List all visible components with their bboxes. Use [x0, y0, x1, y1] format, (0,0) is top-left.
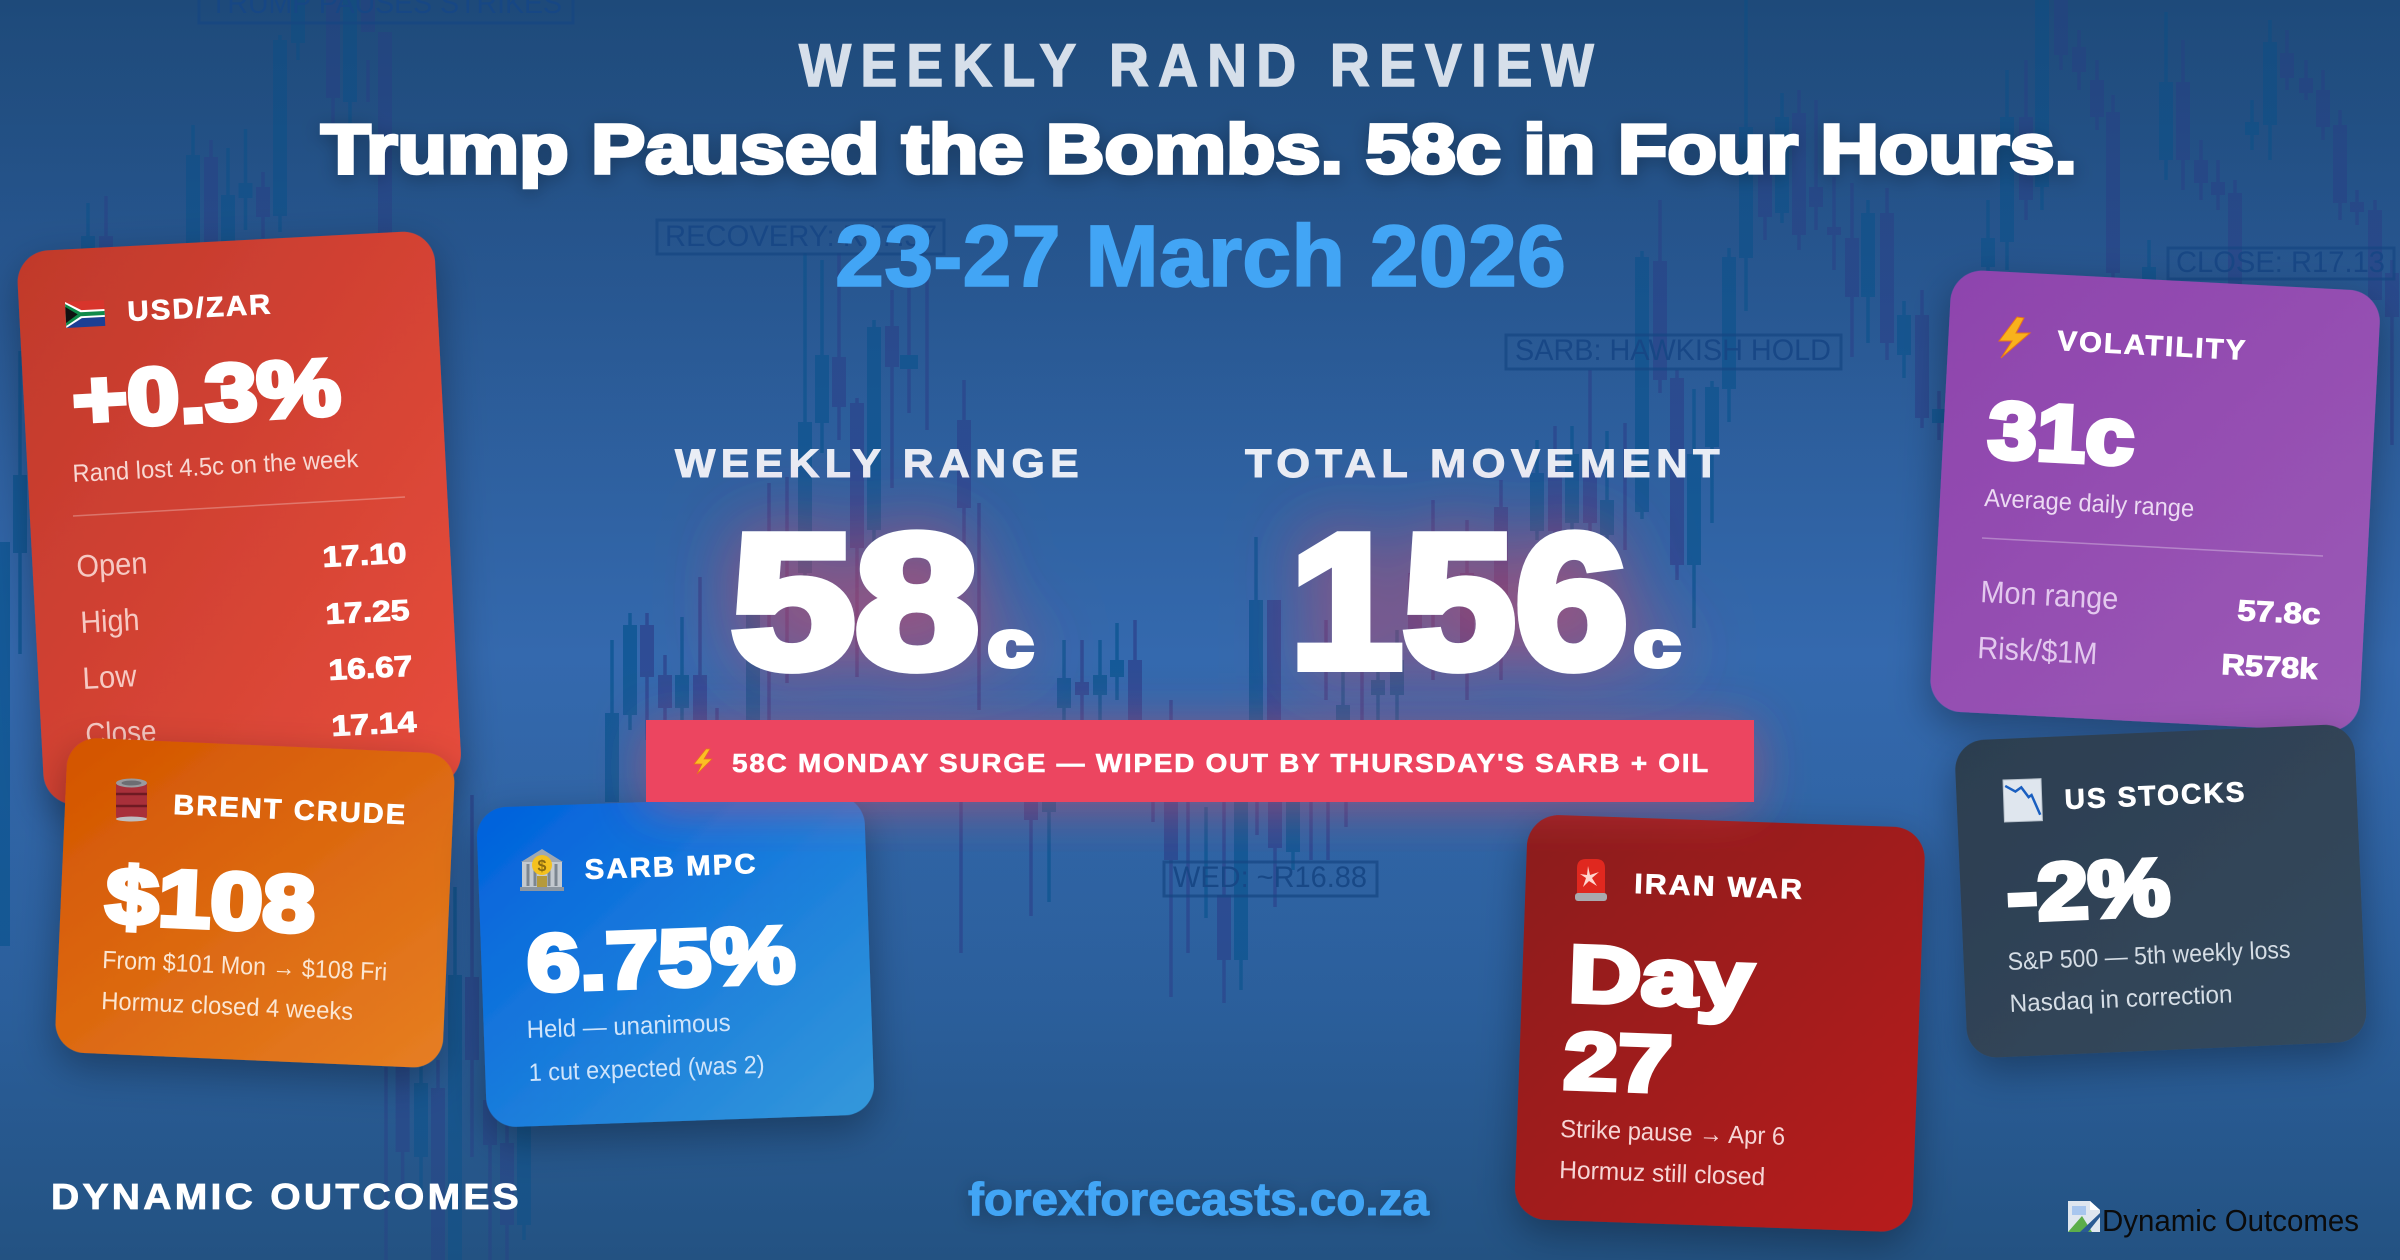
OHLC rows: Open	[76, 545, 148, 584]
banner text: 58C MONDAY SURGE — WIPED OUT BY THURSDAY'S SARB + OIL	[732, 748, 1710, 778]
stat label: TOTAL MOVEMENT	[1245, 442, 1725, 486]
icon: bank	[520, 849, 564, 891]
card heading: BRENT CRUDE	[173, 789, 408, 830]
chart label: Wednesday: WED: ~R16.88	[1173, 861, 1367, 894]
chart label: recovery: RECOVERY: R17.37	[665, 220, 937, 253]
card: Brent crude	[54, 737, 456, 1069]
card: volatility	[1929, 269, 2381, 733]
big value: $108	[104, 851, 317, 949]
icon: siren	[1575, 859, 1607, 901]
card: Iran war: Hormuz still closed	[1559, 1156, 1766, 1191]
footer brand: DYNAMIC OUTCOMES	[51, 1176, 522, 1217]
card: SARB MPC	[476, 794, 875, 1128]
card heading: SARB MPC	[584, 848, 758, 885]
icon: oil drum	[116, 778, 147, 822]
date: 23-27 March 2026	[835, 208, 1566, 305]
subtext: Rand lost 4.5c on the week	[72, 445, 359, 488]
subtext: Held — unanimous	[526, 1009, 731, 1044]
OHLC rows: 17.10	[322, 538, 407, 574]
stat rows: 57.8c	[2237, 595, 2321, 631]
subtext: From $101 Mon → $108 Fri	[102, 946, 388, 986]
stat: total movement	[1245, 442, 1725, 708]
overline heading: WEEKLY RAND REVIEW	[799, 32, 1603, 99]
card: USD/ZAR	[16, 230, 462, 806]
card: Brent crude: Hormuz closed 4 weeks	[101, 987, 354, 1026]
icon: broken image	[2068, 1201, 2100, 1232]
big value	[1562, 929, 1755, 1109]
big value: 31c	[1986, 385, 2137, 482]
OHLC rows	[76, 538, 417, 752]
OHLC rows: Low	[82, 658, 138, 696]
icon: falling chart	[2003, 779, 2042, 822]
chart label: close: CLOSE: R17.13	[2176, 246, 2385, 279]
card: US stocks: Nasdaq in correction	[2009, 980, 2233, 1018]
OHLC rows: High	[80, 602, 140, 640]
OHLC rows: 17.25	[325, 595, 410, 631]
stat: weekly range	[675, 442, 1084, 708]
stat rows: Mon range	[1980, 574, 2119, 616]
footer website: forexforecasts.co.za	[968, 1173, 1429, 1225]
card: US stocks	[1954, 724, 2367, 1059]
card: Iran war	[1514, 814, 1926, 1233]
subtext: Average daily range	[1984, 484, 2195, 523]
subtext: Strike pause → Apr 6	[1560, 1115, 1786, 1151]
big value: 27	[1562, 1016, 1673, 1109]
OHLC rows: 16.67	[328, 651, 413, 687]
chart label: SARB hawkish hold: SARB: HAWKISH HOLD	[1515, 334, 1831, 367]
icon: South Africa flag	[65, 300, 105, 328]
title: Trump Paused the Bombs. 58c in Four Hours.	[321, 110, 2077, 188]
logo alt text: Dynamic Outcomes	[2102, 1203, 2359, 1238]
stat label: WEEKLY RANGE	[675, 442, 1084, 486]
stat rows: Risk/$1M	[1977, 630, 2098, 671]
stat rows: R578k	[2221, 649, 2319, 686]
icon: bank: $	[538, 858, 547, 875]
icon: lightning bolt	[1999, 317, 2030, 358]
card: SARB MPC: 1 cut expected (was 2)	[528, 1051, 765, 1087]
OHLC rows: 17.14	[331, 707, 417, 743]
big value: -2%	[2005, 842, 2172, 938]
card heading: IRAN WAR	[1634, 868, 1805, 905]
OHLC rows: Close	[85, 713, 157, 752]
card heading: US STOCKS	[2064, 776, 2247, 815]
big value: +0.3%	[70, 342, 343, 445]
icon: lightning bolt	[694, 749, 712, 774]
subtext: S&P 500 — 5th weekly loss	[2007, 936, 2291, 976]
card heading: USD/ZAR	[127, 288, 273, 327]
card heading: VOLATILITY	[2057, 325, 2248, 366]
stat value: c	[1634, 608, 1680, 680]
banner	[646, 720, 1754, 802]
stat value	[731, 496, 1033, 708]
stat rows	[1977, 574, 2321, 686]
broken logo image	[2068, 1201, 2359, 1238]
big value: Day	[1567, 929, 1755, 1024]
stat value: 156	[1290, 496, 1628, 708]
big value: 6.75%	[525, 910, 796, 1008]
stat value: c	[988, 608, 1033, 680]
stat value: 58	[731, 496, 979, 708]
